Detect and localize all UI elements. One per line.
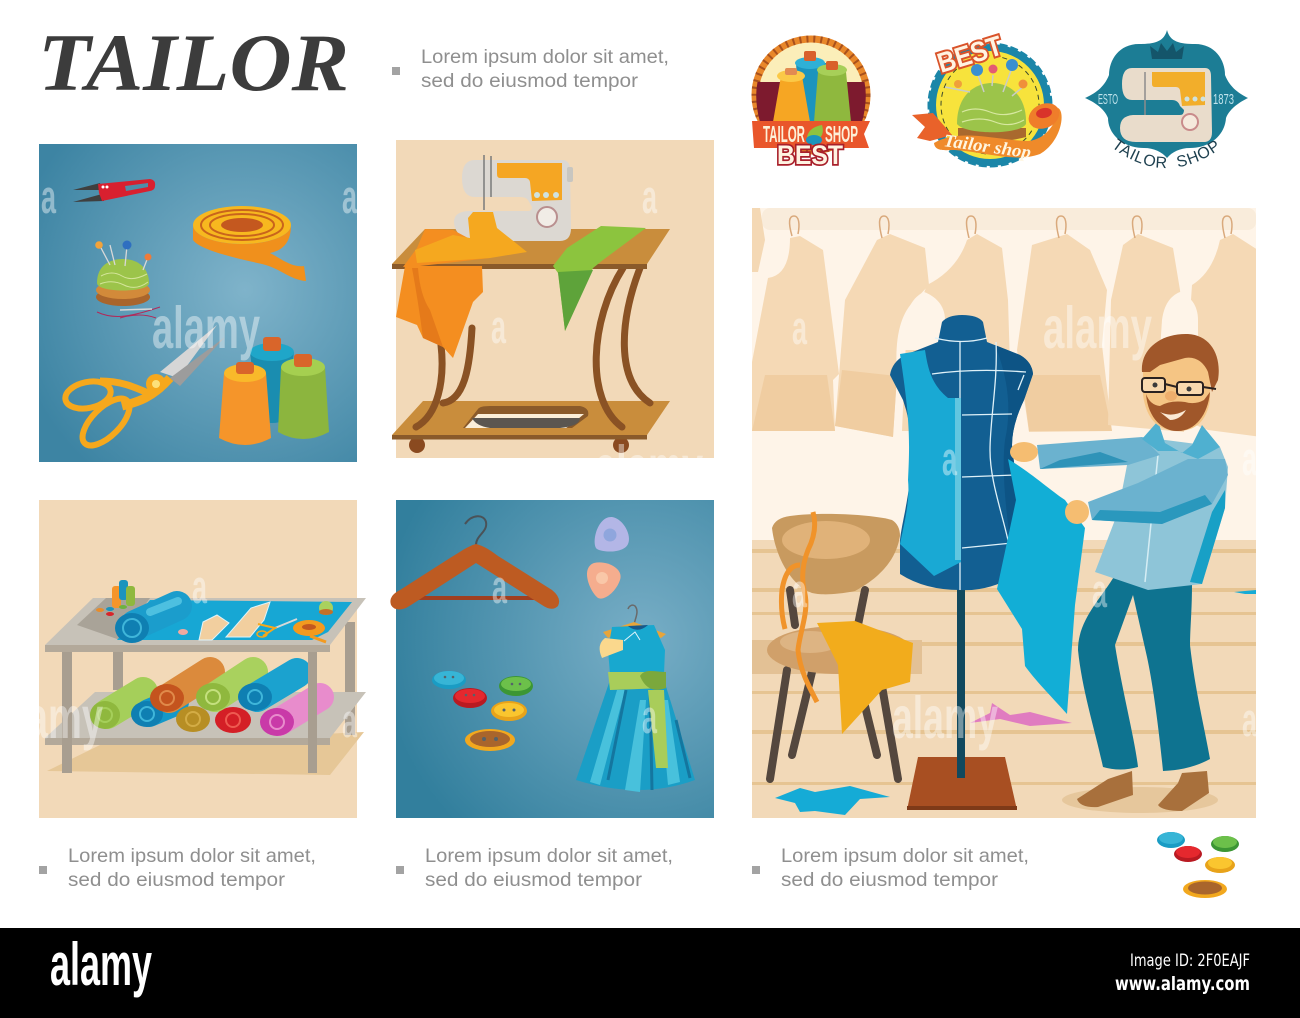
fabric scraps (775, 590, 1256, 815)
icon: sewing machine (454, 155, 573, 241)
footer band (0, 928, 1300, 1018)
floor shadow (47, 732, 364, 775)
rope ring (755, 39, 867, 151)
near sleeve (1088, 459, 1228, 524)
text block: bottom right (752, 845, 1029, 891)
small scissors (257, 619, 297, 637)
watermark: a (492, 560, 507, 613)
text block: header: Lorem ipsum dolor sit amet, (421, 46, 669, 68)
top roll (115, 601, 178, 643)
mannequin (890, 315, 1033, 810)
blue drape (900, 350, 961, 576)
watermark (492, 560, 657, 743)
watermark (41, 170, 357, 361)
hands (1010, 442, 1038, 462)
text block: header (392, 46, 669, 92)
watermark: a (41, 170, 56, 223)
lower shelf (45, 692, 366, 738)
text block: bottom right: sed do eiusmod tempor (781, 869, 999, 891)
far sleeve (1037, 437, 1160, 469)
watermark: a (491, 300, 506, 353)
orange cloth on table (403, 229, 490, 267)
tailor man (997, 334, 1228, 813)
badge: pincushion best tailor shop (912, 30, 1064, 166)
watermark: a (642, 690, 657, 743)
machine (1120, 68, 1212, 142)
footer logo: alamy (50, 931, 152, 998)
text block: bottom center: sed do eiusmod tempor (425, 869, 643, 891)
watermark: a (942, 432, 957, 485)
blue cloth held (997, 459, 1085, 714)
badge: sewing machine esto 1873: 1873 (1213, 91, 1234, 108)
watermark: a (1092, 564, 1107, 617)
ribbon (912, 113, 952, 141)
garment 3 (902, 216, 1012, 431)
text block: bottom right: Lorem ipsum dolor sit amet, (781, 845, 1029, 867)
icon: thread snips (73, 179, 155, 202)
icon: measuring tape (193, 206, 306, 281)
text block: header: sed do eiusmod tempor (421, 70, 639, 92)
text block: bottom left: sed do eiusmod tempor (68, 869, 286, 891)
text block: bottom center: Lorem ipsum dolor sit amet, (425, 845, 673, 867)
badge: sewing machine esto 1873 (1085, 30, 1248, 168)
badge: sewing machine esto 1873: TAILOR SHOP (1114, 138, 1217, 168)
watermark: a (642, 170, 657, 223)
small tape (293, 620, 326, 642)
panel: tailor scene (752, 208, 1262, 818)
yellow cloth (415, 212, 527, 263)
glasses (1142, 378, 1216, 395)
ribbon (752, 121, 870, 148)
floor shadow (1062, 787, 1218, 813)
garment 2 (835, 216, 929, 437)
badge: spools tailor shop best (752, 39, 870, 170)
watermark: a (792, 564, 807, 617)
watermark (492, 188, 703, 458)
watermark: a (1242, 693, 1257, 746)
floor (752, 540, 1256, 818)
stand pole (957, 588, 965, 778)
garment 6 (1191, 215, 1256, 436)
watermark (792, 295, 1257, 751)
pincushion (945, 59, 1028, 142)
orange drape (396, 266, 483, 358)
watermark: a (792, 301, 807, 354)
watermark: alamy (0, 685, 103, 751)
panel: sewing machine table (392, 140, 714, 458)
head (1142, 334, 1219, 431)
measuring tape on chair (781, 512, 817, 702)
table back legs (113, 622, 355, 735)
text block: bottom left: Lorem ipsum dolor sit amet, (68, 845, 316, 867)
watermark (0, 560, 357, 751)
watermark: alamy (892, 685, 998, 751)
watermark: a (1242, 432, 1257, 485)
watermark: alamy (595, 434, 703, 500)
rail (762, 208, 1256, 230)
watermark: alamy (1043, 295, 1152, 361)
green cloth (553, 226, 646, 331)
icon: dress with tag (576, 605, 695, 792)
best arc: BEST (934, 30, 1006, 79)
blue cloth with patterns (117, 600, 352, 640)
panel: fabric rolls table (0, 500, 366, 818)
watermark: a (192, 560, 207, 613)
wall (752, 208, 1256, 548)
stand base (907, 757, 1017, 810)
badge: sewing machine esto 1873: ESTO (1098, 91, 1118, 108)
hanging garments (752, 216, 1262, 437)
icon: thread spools (219, 337, 329, 445)
icon: scissors (63, 325, 225, 453)
crown (1150, 43, 1184, 59)
yellow cloth on chair (817, 621, 913, 734)
watermark: a (342, 170, 357, 223)
icon: buttons (432, 671, 533, 751)
small spools and buttons (96, 580, 135, 616)
collar (1142, 421, 1220, 459)
neck arches (905, 292, 945, 350)
panel: tools on blue (39, 144, 357, 462)
table top (392, 229, 670, 264)
fabric rolls (90, 672, 320, 736)
trousers (1078, 575, 1210, 771)
chair (752, 514, 922, 779)
small pincushion (319, 601, 333, 615)
table lower shelf (392, 401, 670, 453)
footer image id: Image ID: 2F0EAJF (1130, 951, 1250, 971)
torso (890, 315, 1033, 590)
badge: spools tailor shop best: BEST (777, 140, 843, 170)
front legs (62, 652, 317, 773)
icon: pincushion (95, 240, 160, 318)
watermark: a (342, 694, 357, 747)
panel: hanger dress buttons (390, 500, 714, 818)
text block: bottom center (396, 845, 673, 891)
garment 5 (1108, 216, 1186, 432)
shoes (1077, 771, 1133, 807)
spools (773, 51, 851, 125)
table legs (416, 268, 650, 427)
title: TAILOR (38, 17, 349, 108)
badge: spools tailor shop best: SHOP (825, 121, 858, 147)
text block: bottom left (39, 845, 316, 891)
watermark: alamy (152, 295, 260, 361)
badge: spools tailor shop best: TAILOR (763, 121, 805, 147)
footer url: www.alamy.com (1115, 973, 1250, 995)
garment 1 (752, 216, 839, 431)
table top (45, 598, 366, 645)
seam lines (932, 338, 1026, 590)
icon: wooden hanger (390, 516, 559, 609)
icon: chalk pieces (587, 517, 629, 599)
icon: bottom right buttons (1157, 832, 1239, 898)
garment 4 (1017, 216, 1112, 432)
shirt (1095, 437, 1228, 590)
badge: pincushion best tailor shop: Tailor shop (942, 130, 1032, 162)
